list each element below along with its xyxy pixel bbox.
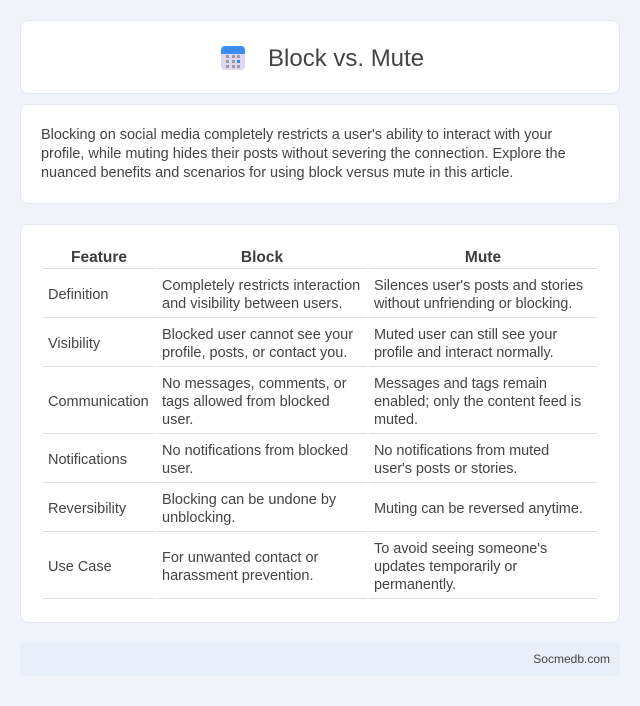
row: Use Case: For unwanted contact or [162, 550, 318, 566]
intro paragraph: profile, while muting hides their posts without severing the connection. Explore the [41, 146, 566, 162]
row: Reversibility: Blocking can be undone by [162, 492, 336, 508]
row: Use Case: Use Case [48, 559, 112, 575]
title: Block vs. Mute [268, 45, 424, 72]
row: Reversibility: unblocking. [162, 510, 235, 526]
row: Use Case [48, 541, 547, 593]
row: Reversibility [48, 492, 583, 526]
footer bar [20, 642, 620, 676]
intro paragraph: Blocking on social media completely restricts a user's ability to interact with your [41, 127, 552, 143]
row: Communication: user. [162, 412, 193, 428]
row: Visibility: profile, posts, or contact you. [162, 345, 347, 361]
row: Reversibility: Muting can be reversed anytime. [374, 501, 583, 517]
row: Definition: Silences user's posts and stories [374, 278, 583, 294]
row: Communication: Communication [48, 394, 149, 410]
row: Communication: No messages, comments, or [162, 376, 347, 392]
row: Reversibility: Reversibility [48, 501, 126, 517]
footer text: Socmedb.com [533, 652, 610, 666]
row: Visibility [48, 327, 557, 361]
row: Communication: enabled; only the content feed is [374, 394, 581, 410]
row: Definition: without unfriending or blocking. [374, 296, 572, 312]
row: Use Case: To avoid seeing someone's [374, 541, 547, 557]
icon: calendar [221, 46, 245, 70]
panel: intro text [20, 104, 620, 204]
row: Use Case: permanently. [374, 577, 456, 593]
row: Definition: and visibility between users. [162, 296, 343, 312]
row: Use Case: updates temporarily or [374, 559, 517, 575]
row: Notifications: user's posts or stories. [374, 461, 517, 477]
panel: title card [20, 20, 620, 94]
table header: Feature: Feature [71, 249, 127, 266]
row: Visibility: Blocked user cannot see your [162, 327, 353, 343]
row: Notifications: No notifications from muted [374, 443, 549, 459]
panel: comparison table [20, 224, 620, 623]
intro paragraph: nuanced benefits and scenarios for using block versus mute in this article. [41, 165, 513, 181]
row: Notifications [48, 443, 549, 477]
row: Communication: Messages and tags remain [374, 376, 547, 392]
intro paragraph [41, 127, 566, 181]
row: Definition [48, 278, 583, 312]
row: Definition: Completely restricts interaction [162, 278, 360, 294]
row: Visibility: Muted user can still see your [374, 327, 557, 343]
row: Visibility: profile and interact normally. [374, 345, 554, 361]
table header: Block: Block [241, 249, 283, 266]
row: Communication: tags allowed from blocked [162, 394, 330, 410]
row: Communication: muted. [374, 412, 418, 428]
table header: Mute: Mute [465, 249, 501, 266]
row: Notifications: user. [162, 461, 193, 477]
row: Notifications: No notifications from blocked [162, 443, 348, 459]
row: Communication [48, 376, 581, 428]
row: Definition: Definition [48, 287, 108, 303]
row: Notifications: Notifications [48, 452, 127, 468]
row: Visibility: Visibility [48, 336, 100, 352]
row: Use Case: harassment prevention. [162, 568, 314, 584]
